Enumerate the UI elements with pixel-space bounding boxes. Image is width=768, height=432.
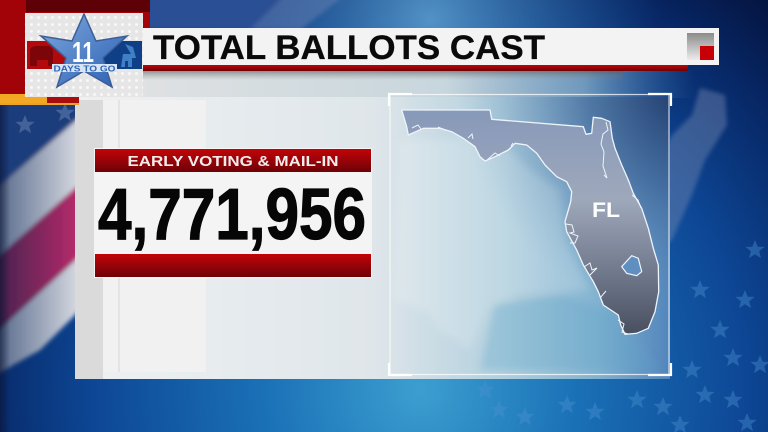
ballots card xyxy=(94,148,372,278)
state label: FL xyxy=(592,199,620,222)
republican panel xyxy=(27,41,72,69)
democrat donkey xyxy=(121,44,136,67)
light content panel xyxy=(75,97,670,379)
florida map xyxy=(402,110,659,334)
title: TOTAL BALLOTS CAST xyxy=(153,29,545,67)
flag stripes top xyxy=(140,0,345,30)
flag stripes left xyxy=(0,0,100,378)
badge background xyxy=(25,13,143,97)
lake okeechobee xyxy=(622,256,642,276)
republican elephant xyxy=(30,46,53,66)
card heading: EARLY VOTING & MAIL-IN xyxy=(128,154,338,170)
days to go label: DAYS TO GO xyxy=(54,64,116,74)
left edge vignette xyxy=(0,100,10,432)
faint US map backdrop xyxy=(395,140,660,370)
red corner block xyxy=(0,0,150,95)
florida outline xyxy=(402,110,659,334)
star xyxy=(41,14,127,87)
header shadow area xyxy=(143,70,695,98)
countdown badge xyxy=(25,13,143,97)
democrat panel xyxy=(98,41,142,69)
flag stars top left xyxy=(15,0,255,133)
orange accent bars xyxy=(0,94,79,105)
card footer xyxy=(95,254,371,277)
corner logo tile xyxy=(687,33,714,60)
title bar white strip xyxy=(143,28,719,65)
flag stars bottom right xyxy=(475,240,768,432)
days number: 11 xyxy=(72,37,94,69)
total ballots number: 4,771,956 xyxy=(98,175,366,255)
title red underline xyxy=(143,65,688,71)
card background xyxy=(94,148,372,278)
card header xyxy=(95,149,371,172)
coastal inlets xyxy=(412,122,641,334)
title bar xyxy=(143,28,719,71)
eastern states xyxy=(640,88,727,250)
map frame xyxy=(389,94,671,375)
